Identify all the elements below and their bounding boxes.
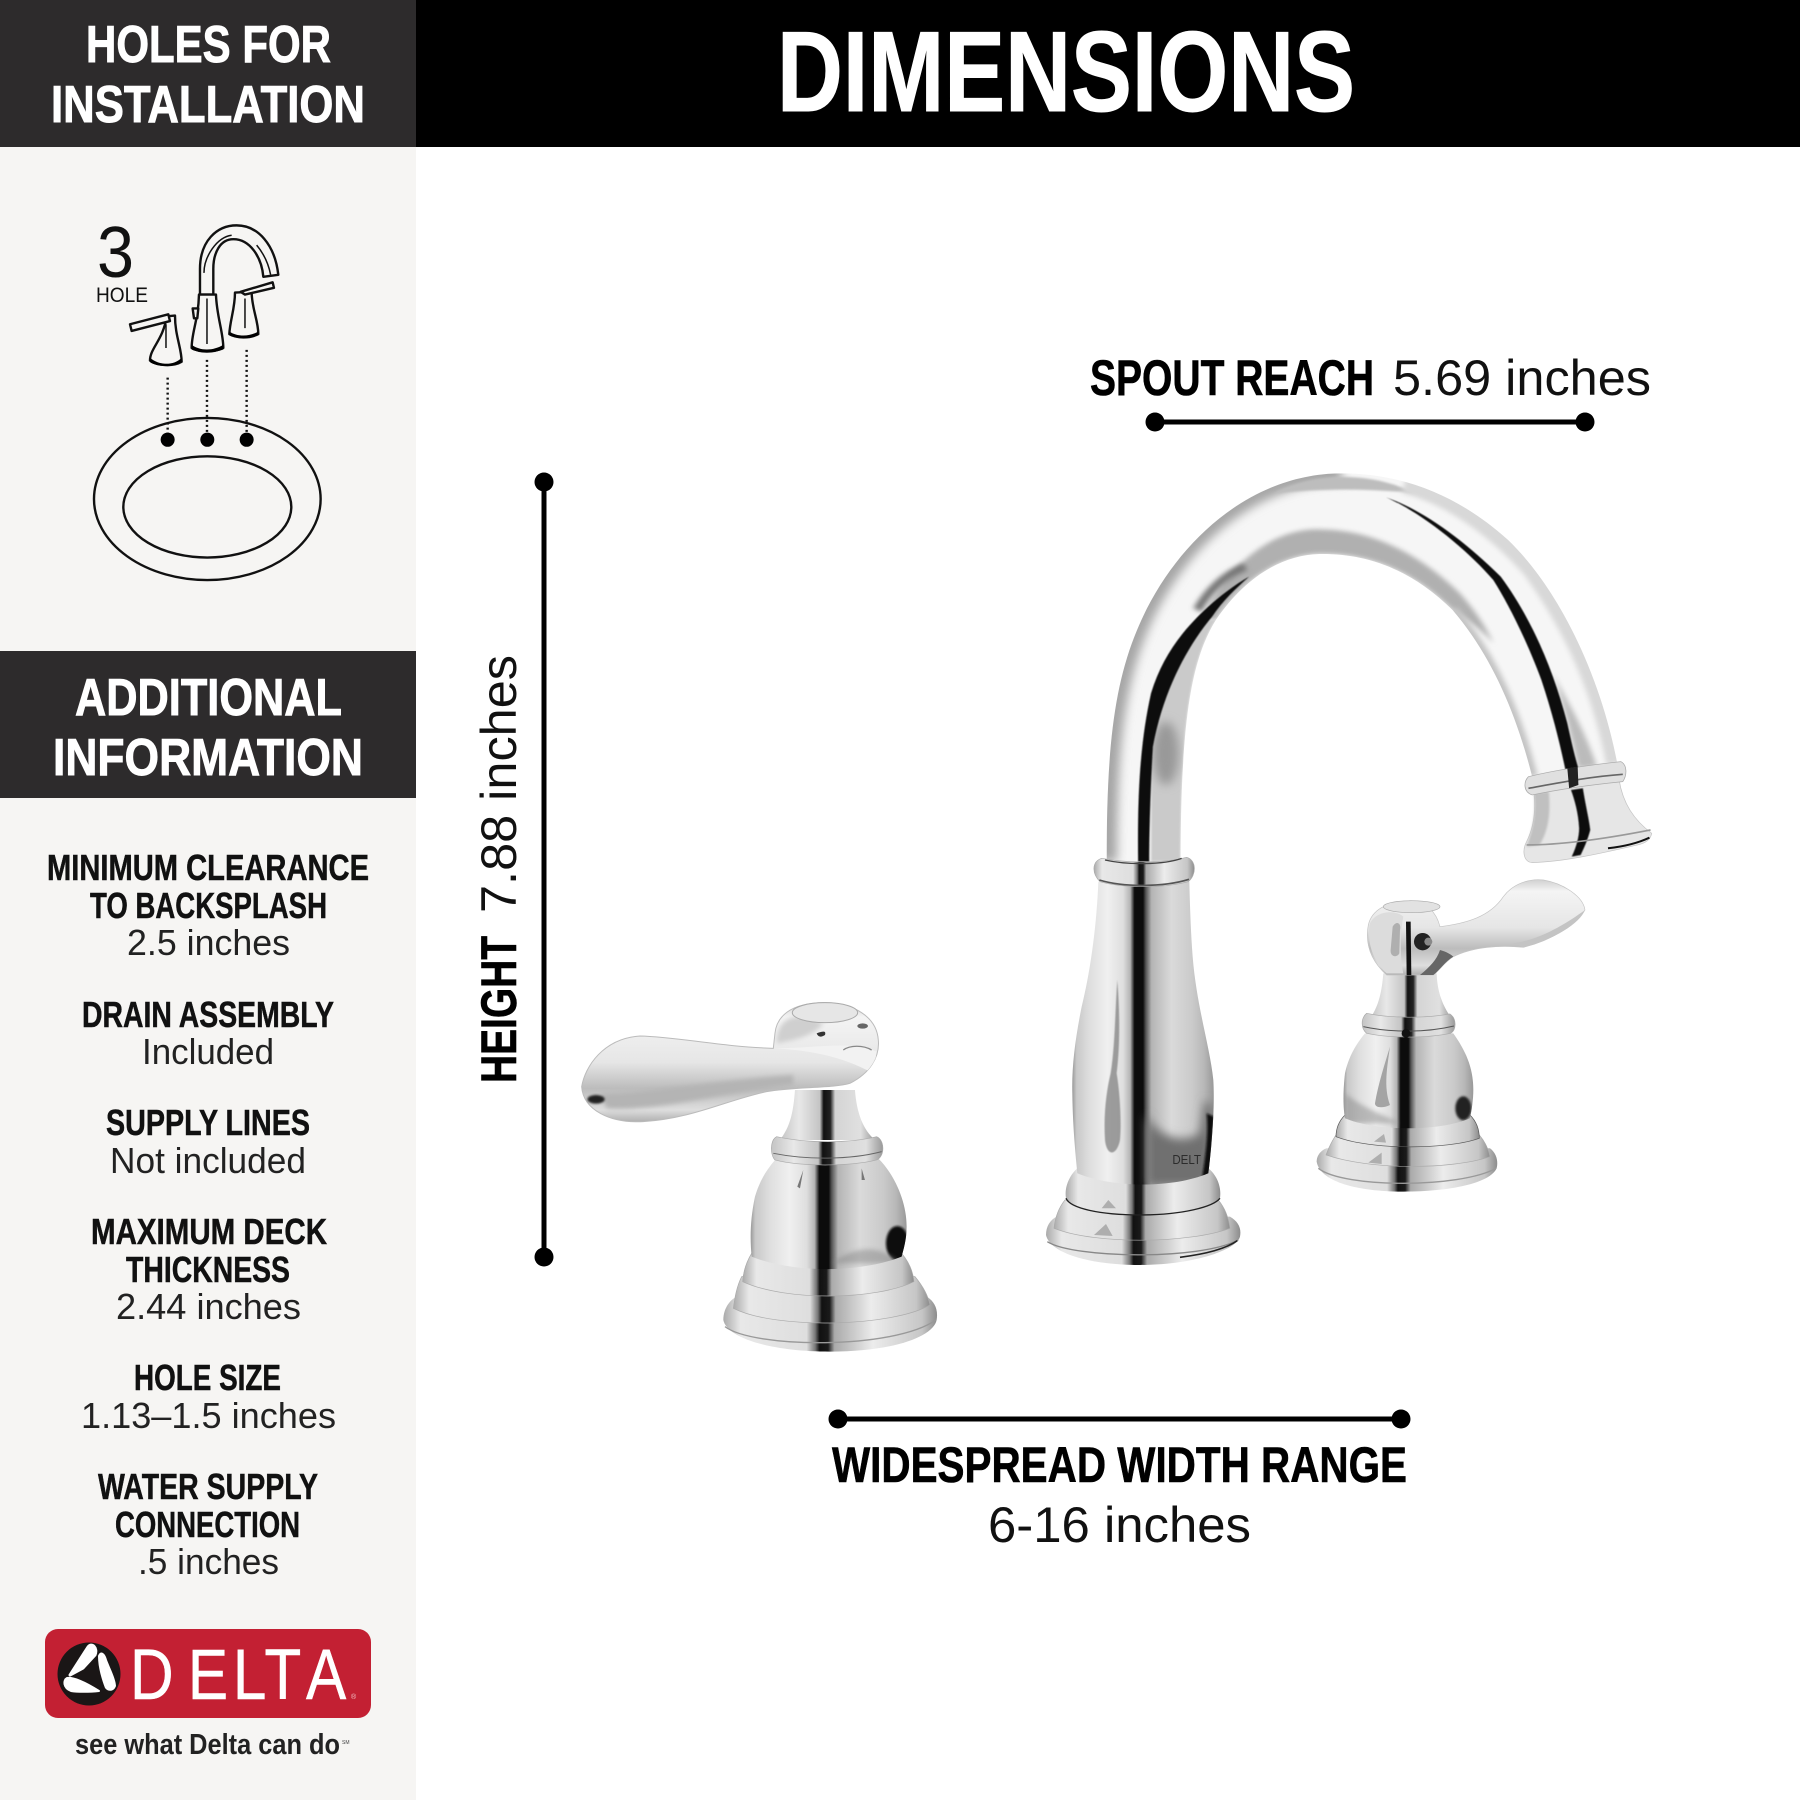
logo: delta: DELTA bbox=[130, 1634, 346, 1714]
neck bbox=[780, 1090, 875, 1140]
spout tube bbox=[1107, 473, 1617, 862]
label: 3 hole: HOLE bbox=[96, 284, 148, 307]
spec: drain assembly bbox=[82, 994, 334, 1072]
dimension: widespread width range bbox=[828, 1410, 1410, 1553]
logo: delta bbox=[45, 1629, 371, 1761]
top disc bbox=[1383, 901, 1440, 913]
logo: delta: ® bbox=[351, 1693, 357, 1701]
heading bar: additional information bbox=[0, 651, 416, 798]
spec: supply lines: Not included bbox=[110, 1140, 306, 1181]
spec: supply lines: SUPPLY LINES bbox=[106, 1102, 310, 1143]
brand mark on body: DELT bbox=[1172, 1153, 1201, 1167]
faucet: right handle bbox=[1317, 880, 1585, 1192]
body bbox=[1072, 882, 1214, 1187]
base bbox=[723, 1253, 937, 1352]
neck bbox=[1370, 973, 1452, 1018]
heading bar: additional information: INFORMATION bbox=[53, 729, 363, 787]
heading bar: holes for installation: HOLES FOR bbox=[86, 16, 331, 74]
spec: minimum clearance: TO BACKSPLASH bbox=[90, 885, 327, 926]
tagline: see what Delta can do bbox=[75, 1729, 340, 1761]
faucet: left handle bbox=[582, 1003, 937, 1352]
collar bbox=[1094, 857, 1194, 887]
spec: minimum clearance: 2.5 inches bbox=[127, 922, 290, 963]
heading bar: holes for installation bbox=[0, 0, 416, 147]
logo: delta: SM bbox=[342, 1740, 350, 1746]
label: 3 hole: 3 bbox=[97, 213, 134, 293]
heading bar: holes for installation: INSTALLATION bbox=[51, 76, 365, 134]
ring bbox=[1362, 1013, 1455, 1038]
icon: sink and small faucet outline bbox=[94, 225, 321, 580]
spec: water supply connection bbox=[98, 1466, 318, 1582]
spec: maximum deck thickness bbox=[91, 1211, 327, 1327]
dimension: spout reach: 5.69 inches bbox=[1393, 350, 1651, 406]
ring bbox=[771, 1137, 883, 1165]
label: 3 hole bbox=[96, 213, 148, 307]
spec: maximum deck thickness: 2.44 inches bbox=[116, 1286, 301, 1327]
dimension: widespread width range: WIDESPREAD WIDTH RANGE bbox=[832, 1437, 1407, 1493]
dimension: spout reach: SPOUT REACH bbox=[1090, 350, 1374, 406]
base bbox=[1317, 1115, 1497, 1192]
dimension: spout reach bbox=[1090, 350, 1651, 432]
spec: supply lines bbox=[106, 1102, 310, 1181]
heading bar: dimensions: DIMENSIONS bbox=[777, 9, 1355, 136]
dimension: widespread width range: 6-16 inches bbox=[988, 1497, 1251, 1553]
lever and hub bbox=[1367, 880, 1585, 975]
dimension: height: HEIGHT bbox=[471, 936, 527, 1083]
dimension: height: 7.88 inches bbox=[471, 655, 527, 913]
icon: three hole sink diagram bbox=[94, 213, 321, 580]
spout tip bbox=[1524, 762, 1652, 863]
spec: water supply connection: CONNECTION bbox=[115, 1504, 300, 1545]
faucet: center spout arc bbox=[1107, 473, 1652, 863]
spec: hole size bbox=[81, 1357, 336, 1436]
spec: minimum clearance: MINIMUM CLEARANCE bbox=[47, 847, 369, 888]
spec: drain assembly: DRAIN ASSEMBLY bbox=[82, 994, 334, 1035]
lever and hub bbox=[582, 1003, 878, 1122]
spec: maximum deck thickness: MAXIMUM DECK bbox=[91, 1211, 327, 1252]
bell bbox=[751, 1158, 909, 1269]
top disc bbox=[792, 1003, 858, 1023]
spec: drain assembly: Included bbox=[142, 1031, 274, 1072]
heading bar: dimensions bbox=[416, 0, 1800, 147]
spec: maximum deck thickness: THICKNESS bbox=[126, 1249, 290, 1290]
icon: delta emblem bbox=[58, 1642, 120, 1706]
panel: left sidebar bbox=[0, 0, 416, 1800]
spec: minimum clearance bbox=[47, 847, 369, 963]
text block: additional information specs bbox=[47, 847, 369, 1582]
faucet: center body and base bbox=[1046, 857, 1240, 1265]
heading bar: additional information: ADDITIONAL bbox=[75, 669, 342, 727]
spec: water supply connection: .5 inches bbox=[138, 1541, 279, 1582]
spec: water supply connection: WATER SUPPLY bbox=[98, 1466, 318, 1507]
spec: hole size: 1.13–1.5 inches bbox=[81, 1395, 336, 1436]
base bbox=[1046, 1168, 1240, 1265]
spec: hole size: HOLE SIZE bbox=[134, 1357, 281, 1398]
dimension: height bbox=[471, 472, 554, 1266]
bell bbox=[1343, 1033, 1473, 1128]
